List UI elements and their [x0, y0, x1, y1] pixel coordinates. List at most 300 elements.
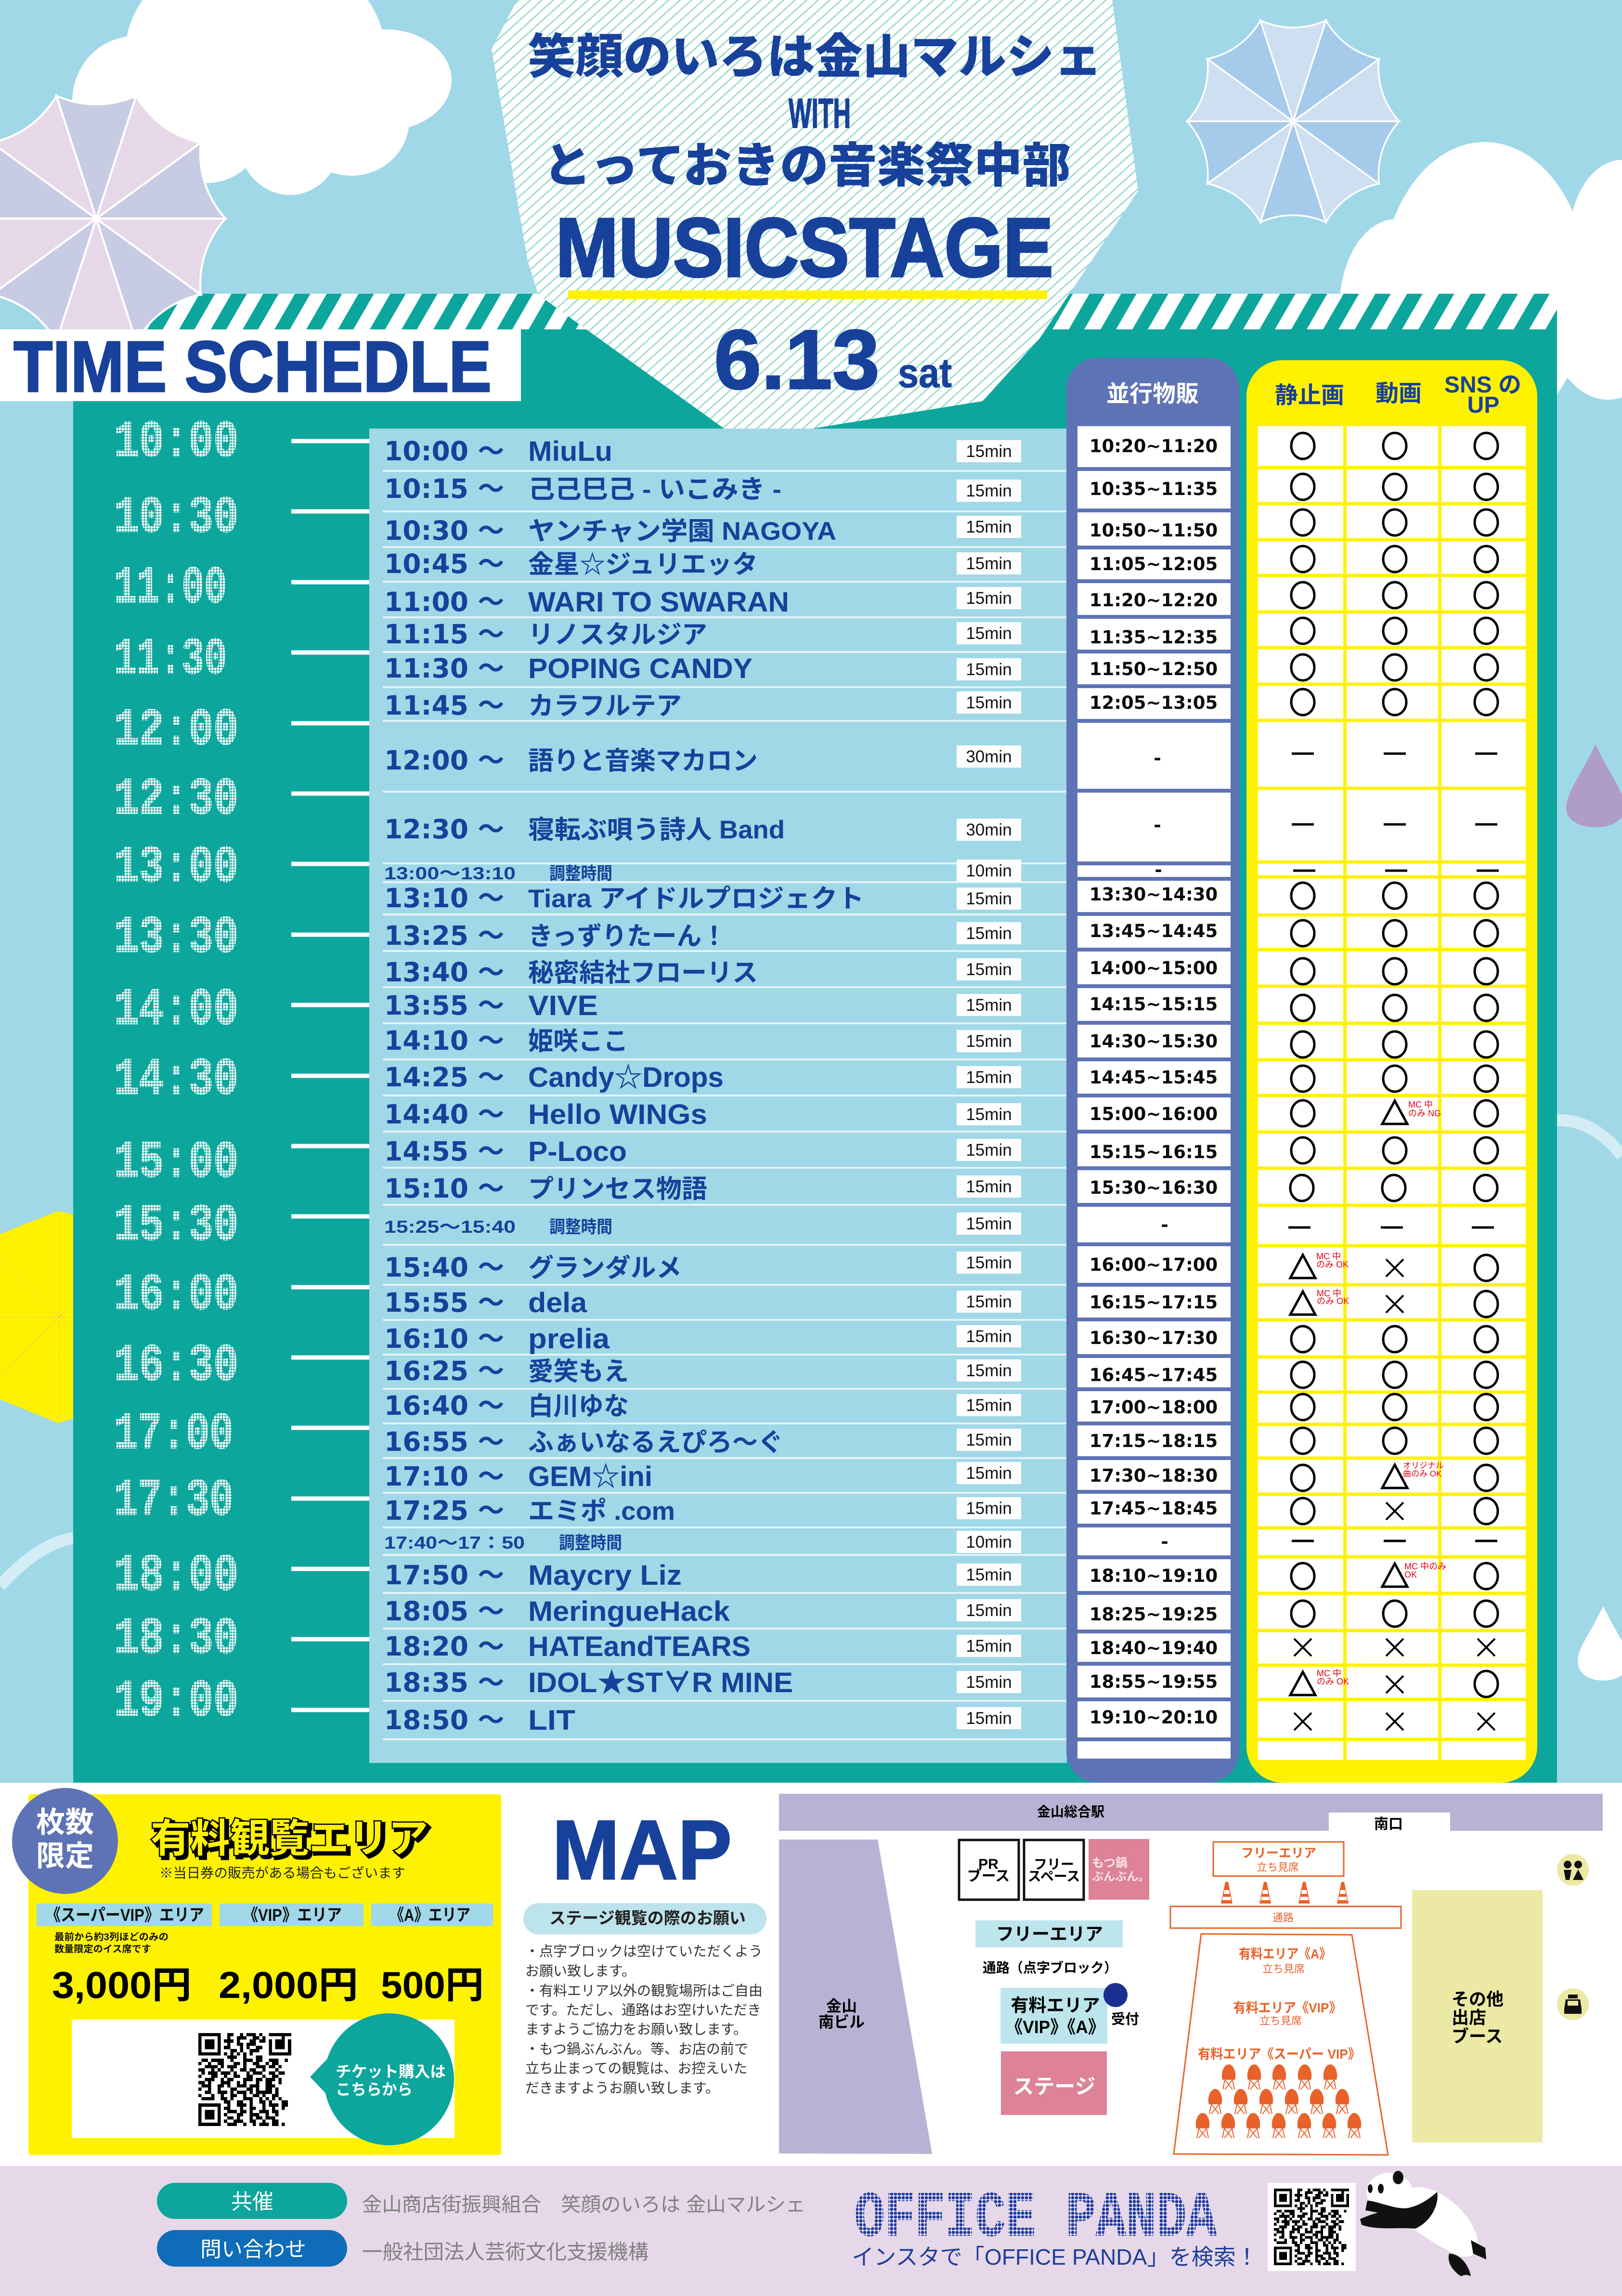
row: 15:25 adjustment: 15:25～15:40	[384, 1217, 516, 1237]
ticket box	[72, 2020, 454, 2138]
panel: merchandise times: 18:25~19:25	[1090, 1604, 1218, 1625]
row: 10:30	[384, 515, 1021, 546]
row: 18:20: 18:20 ～	[384, 1631, 504, 1662]
row: 15:55	[384, 1287, 1021, 1318]
time axis: dot-matrix hour labels: 19:00	[114, 1672, 238, 1731]
row: 14:55: 15min	[966, 1141, 1012, 1160]
umbrella: left lavender	[0, 96, 225, 341]
row: 13:40: 秘密結社フローリス	[528, 959, 758, 987]
permission red notes: のみ OK	[1317, 1296, 1349, 1306]
row: 12:30: 30min	[966, 821, 1012, 839]
row: 13:00 adjustment	[384, 860, 1021, 883]
row: 10:30: 10:30 ～	[384, 515, 504, 546]
row: 13:40: 13:40 ～	[384, 957, 504, 988]
map: south building	[779, 1839, 932, 2154]
row: 15:25 adjustment	[384, 1213, 1021, 1237]
panel: merchandise times: 10:50~11:50	[1090, 520, 1218, 541]
co-host names: 金山商店街振興組合 笑顔のいろは 金山マルシェ	[362, 2193, 805, 2216]
row: 14:40: 15min	[966, 1105, 1012, 1124]
area tabs: 《スーパーVIP》エリア	[46, 1906, 204, 1925]
map: motsunabe booth: ぶんぶん。	[1092, 1870, 1150, 1883]
row: 16:40: 白川ゆな	[528, 1392, 629, 1421]
time axis: dot-matrix hour labels: 11:30	[114, 630, 227, 689]
panel: merchandise times: 17:00~18:00	[1090, 1397, 1218, 1418]
panel: merchandise times: 17:30~18:30	[1090, 1465, 1218, 1486]
permission column headings: SNS の	[1444, 372, 1521, 398]
panel: merchandise times: 17:45~18:45	[1090, 1498, 1218, 1519]
panel: merchandise times: 14:30~15:30	[1090, 1031, 1218, 1052]
text: viewing requests: 立ち止まっての観覧は、お控えいた	[525, 2061, 747, 2076]
callout: buy tickets here: こちらから	[336, 2081, 413, 2098]
panel: merchandise times: 11:50~12:50	[1090, 659, 1218, 679]
row: 10:30: ヤンチャン学園 NAGOYA	[528, 517, 836, 546]
row: 12:30: 寝転ぶ唄う詩人 Band	[528, 816, 785, 844]
row: 17:25: 15min	[966, 1499, 1012, 1518]
date: 6.13	[714, 313, 880, 407]
row: 14:10	[384, 1025, 1021, 1056]
panel: merchandise times: 16:00~17:00	[1090, 1254, 1218, 1275]
permission column headings: 動画	[1375, 381, 1422, 406]
panel: merchandise times: 12:05~13:05	[1090, 692, 1218, 713]
pill: co-host: 共催	[231, 2190, 273, 2214]
row: 12:30: 12:30 ～	[384, 814, 504, 845]
row: 10:00 MiuLu: 15min	[966, 442, 1012, 461]
map: cones	[1221, 1882, 1349, 1904]
row: 15:10	[384, 1173, 1021, 1204]
row: 10:45: 金星☆ジュリエッタ	[528, 550, 758, 579]
row: 14:40: 14:40 ～	[384, 1099, 504, 1130]
row: 10:15: 15min	[966, 482, 1012, 500]
row: 12:00: 30min	[966, 747, 1012, 766]
row: 17:50	[384, 1560, 1021, 1591]
yellow underline	[568, 290, 1047, 299]
row: 17:10: 17:10 ～	[384, 1461, 504, 1492]
row: 15:25 adjustment: 15min	[966, 1214, 1012, 1233]
QR code: instagram	[1268, 2183, 1356, 2271]
striped awning	[140, 294, 1557, 329]
panel: merchandise times: 10:35~11:35	[1090, 479, 1218, 499]
prices	[52, 1964, 484, 2006]
row: 14:40	[384, 1099, 1021, 1130]
row: 18:50: LIT	[528, 1705, 575, 1736]
row: 14:10: 14:10 ～	[384, 1025, 504, 1056]
row: 13:25	[384, 920, 1021, 951]
row: 16:25: 15min	[966, 1361, 1012, 1380]
row: 18:50: 15min	[966, 1709, 1012, 1728]
row: 18:05: 18:05 ～	[384, 1596, 504, 1627]
map: paid seating area: 有料エリア《スーパー VIP》	[1198, 2047, 1361, 2061]
title hatched panel	[492, 0, 1138, 429]
time axis: dot-matrix hour labels: 15:30	[114, 1197, 238, 1255]
time axis: dot-matrix hour labels: 14:00	[114, 981, 238, 1040]
row: 10:30: 15min	[966, 518, 1012, 536]
title WITH: WITH	[789, 91, 851, 137]
time axis: dot-matrix hour labels: 12:30	[114, 770, 238, 829]
map: passage: 通路（点字ブロック）	[983, 1960, 1117, 1975]
panel: merchandise times: 11:35~12:35	[1090, 627, 1218, 648]
row: 13:40	[384, 957, 1021, 988]
prices: 3,000円	[52, 1964, 192, 2006]
panel: merchandise times: 16:15~17:15	[1090, 1292, 1218, 1313]
text: viewing requests	[525, 1944, 763, 2096]
row: 12:30	[384, 814, 1021, 845]
map: free area	[975, 1920, 1123, 1947]
row: 14:55	[384, 1136, 1021, 1167]
row: 13:40: 15min	[966, 960, 1012, 979]
panel: merchandise times: 18:40~19:40	[1090, 1638, 1218, 1658]
merchandise heading: 並行物販	[1106, 381, 1199, 407]
permission red notes: MC 中	[1316, 1252, 1341, 1261]
sky background	[0, 0, 1622, 1783]
row: 16:25	[384, 1356, 1021, 1386]
badge: limited quantity	[12, 1788, 118, 1894]
row: 17:50: Maycry Liz	[528, 1560, 682, 1591]
map: stage: ステージ	[1013, 2075, 1096, 2099]
panel: paid viewing area	[12, 1788, 501, 2155]
row: 16:55: ふぁいなるえぴろ～ぐ	[528, 1428, 783, 1457]
panel: merchandise times: -	[1161, 1214, 1168, 1235]
prices: 2,000円	[219, 1964, 358, 2006]
row: 13:10	[384, 883, 1021, 913]
row: 14:25: Candy☆Drops	[528, 1062, 724, 1093]
row: 14:55: P-Loco	[528, 1136, 627, 1167]
map: free space: スペース	[1028, 1869, 1080, 1884]
permission red notes	[1316, 1100, 1446, 1686]
icon: taxi	[1557, 1988, 1589, 2020]
permission red notes: MC 中	[1317, 1669, 1341, 1678]
row: 16:55	[384, 1426, 1021, 1457]
panel: merchandise times: 14:15~15:15	[1090, 994, 1218, 1015]
map: south building: 金山	[826, 1997, 857, 2015]
panel: merchandise times: 14:45~15:45	[1090, 1067, 1218, 1088]
row: 18:20: 15min	[966, 1637, 1012, 1656]
row: 16:10: 16:10 ～	[384, 1323, 504, 1354]
permission red notes: MC 中	[1408, 1100, 1433, 1109]
time axis: dot-matrix hour labels: 18:30	[114, 1610, 238, 1669]
pill: viewing requests	[523, 1903, 766, 1934]
permission red notes: MC 中	[1317, 1289, 1341, 1298]
map: paid seating area	[1174, 1934, 1388, 2155]
row: 13:10: 13:10 ～	[384, 883, 504, 913]
panel: merchandise times: 15:00~16:00	[1090, 1104, 1218, 1124]
row: 15:40	[384, 1252, 1021, 1283]
note: front rows	[54, 1931, 169, 1955]
row: 18:05	[384, 1596, 1021, 1627]
panel: merchandise times	[1066, 358, 1239, 1783]
panel: merchandise times: 18:55~19:55	[1090, 1671, 1218, 1692]
map	[779, 1794, 1603, 2155]
row: 12:00	[384, 745, 1021, 776]
row: 14:25	[384, 1062, 1021, 1093]
map: paid area reception	[1000, 1983, 1139, 2044]
umbrella: right blue	[1187, 21, 1399, 222]
map: paid area reception: 受付	[1111, 2011, 1139, 2027]
map: motsunabe booth	[1089, 1839, 1150, 1900]
text: viewing requests: ・有料エリア以外の観覧場所はご自由	[525, 1983, 763, 1999]
pill: viewing requests: ステージ観覧の際のお願い	[549, 1909, 746, 1928]
text: viewing requests: ・もつ鍋ぶんぶん。等、お店の前で	[525, 2041, 748, 2057]
panel: merchandise times: -	[1161, 1531, 1168, 1552]
time axis: dot-matrix hour labels: 14:30	[114, 1051, 238, 1109]
pill: co-host	[157, 2183, 347, 2219]
row: 15:40: 15:40 ～	[384, 1252, 504, 1283]
map: standing free area: 立ち見席	[1257, 1861, 1299, 1873]
row: 10:15: 10:15 ～	[384, 473, 504, 504]
row: 10:45	[384, 548, 1021, 579]
panel: merchandise times: 15:30~16:30	[1090, 1177, 1218, 1198]
instagram prompt: インスタで「OFFICE PANDA」を検索！	[852, 2244, 1258, 2270]
row: 14:40: Hello WINGs	[528, 1099, 707, 1130]
panel: merchandise times: 15:15~16:15	[1090, 1142, 1218, 1162]
row: 17:10: GEM☆ini	[528, 1461, 652, 1492]
map: paid area reception: 《VIP》《A》	[1006, 2017, 1105, 2037]
permission red notes: のみ NG	[1408, 1109, 1441, 1118]
map: paid seating area: 有料エリア《VIP》	[1233, 2000, 1341, 2015]
time axis: dot-matrix hour labels: 17:30	[114, 1472, 234, 1530]
panel: merchandise times: -	[1154, 748, 1161, 769]
note: front rows: 最前から約3列ほどのみの	[54, 1931, 169, 1943]
row: 17:40 adjustment: 17:40～17：50	[384, 1533, 525, 1552]
time axis: dot-matrix hour labels: 12:00	[114, 701, 238, 760]
title line 1: 笑顔のいろは金山マルシェ	[528, 30, 1102, 83]
row: 16:40: 16:40 ～	[384, 1390, 504, 1421]
date	[714, 313, 952, 407]
row: 17:40 adjustment: 10min	[966, 1533, 1012, 1552]
row: 17:10	[384, 1461, 1021, 1492]
row: 17:10: 15min	[966, 1464, 1012, 1483]
row: 17:50: 17:50 ～	[384, 1560, 504, 1591]
time axis: dot-matrix hour labels: 10:00	[114, 413, 238, 472]
map: PR booth	[959, 1840, 1019, 1900]
map: station	[779, 1794, 1603, 1832]
row: 14:10: 姫咲ここ	[528, 1027, 628, 1056]
row: 17:40 adjustment: 調整時間	[559, 1533, 622, 1552]
panel: merchandise times: 16:30~17:30	[1090, 1328, 1218, 1348]
row: 15:40: 15min	[966, 1253, 1012, 1272]
row: 16:55: 16:55 ～	[384, 1426, 504, 1457]
map: standing free area: フリーエリア	[1241, 1846, 1316, 1860]
row: 16:10: 15min	[966, 1327, 1012, 1346]
badge: limited quantity: 限定	[36, 1840, 94, 1872]
map: south building: 南ビル	[818, 2013, 865, 2031]
raindrop: purple	[1566, 744, 1622, 827]
row: 13:00 adjustment: 10min	[966, 861, 1012, 880]
map: PR booth: PR	[978, 1856, 999, 1872]
panel: merchandise times: 14:00~15:00	[1090, 958, 1218, 978]
title block	[528, 30, 1102, 294]
row: 13:25: 15min	[966, 924, 1012, 943]
area tabs	[37, 1904, 493, 1926]
row: 15:10: 15min	[966, 1177, 1012, 1196]
map: PR booth: ブース	[967, 1868, 1010, 1884]
map: other booths: その他	[1452, 1989, 1504, 2009]
illustration: panda	[1360, 2171, 1486, 2276]
badge: limited quantity: 枚数	[36, 1806, 94, 1839]
map: station: 金山総合駅	[1037, 1804, 1104, 1819]
row: 11:15	[384, 619, 1021, 650]
cloud: top left	[72, 0, 452, 195]
row: 13:25: きっずりたーん！	[528, 922, 727, 951]
row: 13:00 adjustment: 調整時間	[549, 863, 612, 883]
logo: OFFICE PANDA: OFFICE PANDA	[855, 2182, 1217, 2255]
heading: paid viewing area: 有料観覧エリア	[154, 1819, 431, 1863]
row: 12:00: 語りと音楽マカロン	[528, 747, 758, 775]
row: 13:55	[384, 990, 1021, 1021]
row: 13:10: 15min	[966, 889, 1012, 908]
row: 11:30: POPING CANDY	[528, 653, 753, 684]
row: 11:15: 15min	[966, 624, 1012, 643]
map: other booths: ブース	[1452, 2026, 1503, 2046]
map: stage	[1001, 2051, 1107, 2115]
time axis: dot-matrix hour labels	[114, 413, 238, 1731]
contact name: 一般社団法人芸術文化支援機構	[362, 2241, 649, 2263]
icon: restroom	[1557, 1854, 1589, 1886]
permission red notes: MC 中のみ	[1404, 1562, 1446, 1571]
row: 17:40 adjustment	[384, 1531, 1021, 1553]
row: 11:15: 11:15 ～	[384, 619, 504, 650]
permission red notes: OK	[1404, 1570, 1417, 1579]
map: chairs	[1196, 2064, 1361, 2138]
area tabs: 《VIP》エリア	[243, 1906, 342, 1925]
panel: merchandise times: 13:45~14:45	[1090, 921, 1218, 941]
row: 11:45: 15min	[966, 693, 1012, 712]
row: 10:45: 10:45 ～	[384, 548, 504, 579]
row: 17:25	[384, 1495, 1021, 1526]
map: paid area reception: 有料エリア	[1011, 1996, 1100, 2015]
map: orange passage	[1170, 1906, 1401, 1928]
row: 15:10: プリンセス物語	[528, 1175, 707, 1203]
panel: merchandise times: -	[1155, 860, 1162, 880]
row: 16:25: 愛笑もえ	[528, 1357, 629, 1386]
row: 11:00: WARI TO SWARAN	[528, 587, 789, 618]
row: 13:00 adjustment: 13:00～13:10	[384, 863, 516, 883]
text: viewing requests: お願い致します。	[525, 1963, 636, 1979]
note: front rows: 数量限定のイス席です	[54, 1944, 151, 1955]
row: 14:25: 15min	[966, 1068, 1012, 1087]
panel: merchandise times: 19:10~20:10	[1090, 1707, 1218, 1728]
map: other booths	[1412, 1890, 1543, 2142]
row: 16:10: prelia	[528, 1323, 610, 1355]
row: 17:25: エミポ .com	[528, 1497, 675, 1526]
time axis: dot-matrix hour labels: 13:30	[114, 909, 238, 967]
footer band background	[0, 2166, 1622, 2296]
row: 11:45: カラフルテア	[528, 692, 682, 720]
text: viewing requests: ますようご協力をお願い致します。	[525, 2022, 747, 2037]
row: 10:45: 15min	[966, 554, 1012, 573]
row: 17:50: 15min	[966, 1565, 1012, 1584]
title MUSICSTAGE: MUSICSTAGE	[556, 200, 1053, 294]
row: 18:20	[384, 1631, 1021, 1662]
row: 13:55: VIVE	[528, 990, 598, 1021]
row: 15:55: 15min	[966, 1292, 1012, 1311]
row: 16:55: 15min	[966, 1431, 1012, 1449]
row: 15:40: グランダルメ	[528, 1254, 682, 1282]
row: 10:00 MiuLu: MiuLu	[528, 436, 612, 467]
map: paid seating area: 立ち見席	[1262, 1963, 1305, 1975]
time axis: dot-matrix hour labels: 10:30	[114, 489, 238, 548]
row: 10:15: 己己巳己 - いこみき -	[528, 475, 781, 504]
heading: time schedule: TIME SCHEDLE	[13, 326, 492, 407]
row: 12:00: 12:00 ～	[384, 745, 504, 776]
row: 18:50: 18:50 ～	[384, 1705, 504, 1735]
row: 18:20: HATEandTEARS	[528, 1631, 751, 1662]
note: same-day tickets: ※当日券の販売がある場合もございます	[159, 1866, 405, 1880]
light blue timetable panel	[369, 429, 1067, 1763]
row: 15:55: 15:55 ～	[384, 1287, 504, 1318]
row: 16:40: 15min	[966, 1396, 1012, 1415]
row: 11:00: 15min	[966, 589, 1012, 608]
map: free space: フリー	[1034, 1857, 1074, 1872]
permission red notes: のみ OK	[1316, 1260, 1349, 1269]
text: viewing requests: だきますようお願い致します。	[525, 2080, 719, 2096]
row: 13:10: Tiara アイドルプロジェクト	[528, 885, 864, 913]
panel: merchandise times: 17:15~18:15	[1090, 1431, 1218, 1451]
callout: buy tickets here: チケット購入は	[336, 2063, 446, 2080]
row: 13:25: 13:25 ～	[384, 920, 504, 951]
footer	[157, 2171, 1486, 2276]
panel: merchandise times: 18:10~19:10	[1090, 1565, 1218, 1586]
QR code: tickets	[198, 2035, 291, 2125]
permission column headings: 静止画	[1275, 383, 1344, 408]
area tabs: 《A》エリア	[390, 1906, 470, 1925]
pill: contact: 問い合わせ	[200, 2238, 306, 2261]
row: 11:15: リノスタルジア	[528, 621, 707, 649]
panel: merchandise times: 11:20~12:20	[1090, 590, 1218, 611]
row: 16:10	[384, 1323, 1021, 1355]
map: free area: フリーエリア	[996, 1924, 1103, 1944]
time axis: dot-matrix hour labels: 18:00	[114, 1547, 238, 1605]
row: 14:10: 15min	[966, 1032, 1012, 1051]
text: viewing requests: ・点字ブロックは空けていただくよう	[525, 1944, 763, 1959]
row: 11:30: 15min	[966, 660, 1012, 679]
permission red notes: 曲のみ OK	[1403, 1469, 1442, 1478]
row: 13:55: 15min	[966, 996, 1012, 1015]
permission column headings	[1275, 372, 1521, 418]
row: 11:45: 11:45 ～	[384, 690, 504, 721]
panel: merchandise times: 13:30~14:30	[1090, 884, 1218, 905]
timetable rows	[384, 436, 1021, 1736]
time axis: dot-matrix hour labels: 15:00	[114, 1134, 238, 1192]
pill: contact	[157, 2230, 347, 2267]
row: 14:25: 14:25 ～	[384, 1062, 504, 1093]
heading: paid viewing area: 有料観覧エリア	[151, 1817, 428, 1861]
row: 18:05: MeringueHack	[528, 1596, 730, 1627]
time axis: dot-matrix hour labels: 16:30	[114, 1337, 238, 1396]
map: standing free area	[1213, 1842, 1344, 1876]
row: 10:00 MiuLu	[384, 436, 1021, 467]
permission red notes: のみ OK	[1317, 1677, 1349, 1686]
map: motsunabe booth: もつ鍋	[1092, 1856, 1128, 1870]
panel: merchandise times: -	[1154, 815, 1161, 835]
panel: merchandise times: 10:20~11:20	[1090, 436, 1218, 457]
green schedule panel	[73, 329, 1557, 1783]
row: 11:30: 11:30 ～	[384, 653, 504, 684]
yellow umbrella at left edge	[0, 1211, 73, 1423]
map: other booths: 出店	[1452, 2008, 1486, 2027]
title line 2: とっておきの音楽祭中部	[543, 139, 1071, 192]
permission column headings: UP	[1467, 392, 1499, 418]
row: 16:40	[384, 1390, 1021, 1421]
row: 17:25: 17:25 ～	[384, 1495, 504, 1526]
row: 18:05: 15min	[966, 1601, 1012, 1620]
time axis: dot-matrix hour labels: 17:00	[114, 1405, 234, 1464]
row: 11:45	[384, 690, 1021, 721]
cloud: right	[1339, 142, 1622, 436]
callout: buy tickets here	[310, 2013, 454, 2145]
row: 10:00 MiuLu: 10:00 ～	[384, 436, 504, 467]
row: 18:35: IDOL★ST∀R MINE	[528, 1667, 793, 1698]
permission symbols	[1288, 433, 1499, 1730]
